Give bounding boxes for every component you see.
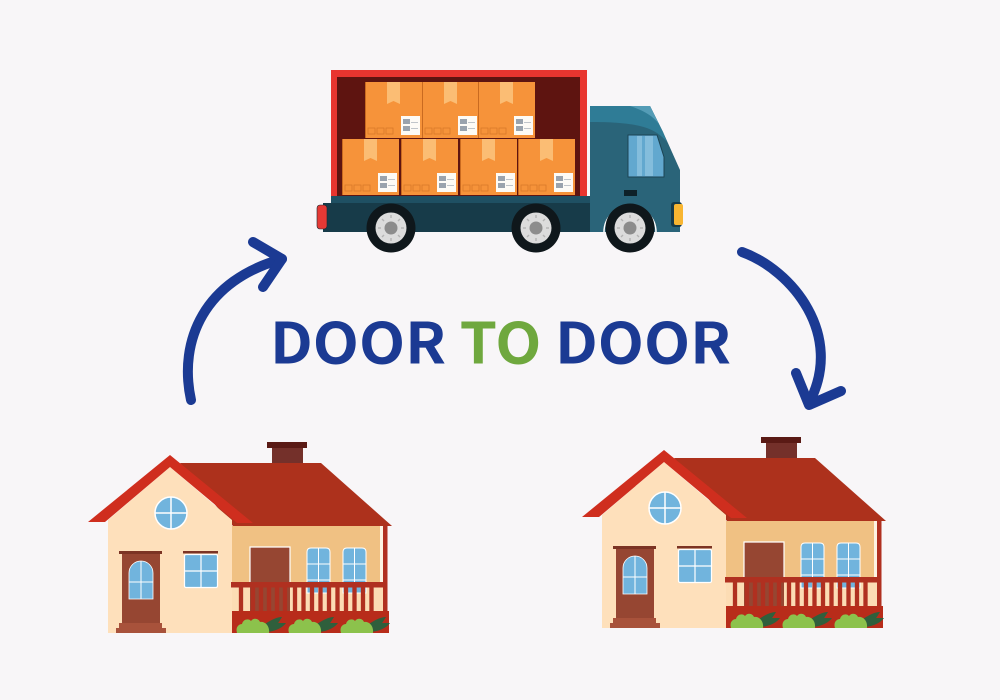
round attic window	[155, 497, 187, 529]
gable roof edge	[88, 455, 253, 523]
delivery truck	[317, 70, 683, 252]
truck cab	[590, 106, 680, 232]
wheels	[366, 204, 656, 252]
title: DOOR TO DOOR	[270, 298, 731, 380]
arrow: truck to house	[742, 252, 841, 405]
door handle	[624, 190, 637, 196]
cargo container	[331, 70, 587, 197]
shrubs	[237, 617, 390, 633]
front door	[116, 551, 166, 633]
front window	[183, 551, 218, 588]
main roof	[180, 463, 392, 526]
tail light	[317, 205, 327, 229]
front gable wall	[108, 467, 232, 633]
headlight	[671, 202, 683, 227]
stacked cardboard boxes	[342, 82, 575, 195]
house: destination	[582, 437, 886, 628]
truck chassis	[323, 196, 590, 232]
chimney	[267, 442, 307, 464]
porch wall	[232, 526, 383, 613]
house: origin	[88, 442, 392, 633]
porch door	[250, 547, 290, 613]
porch windows	[307, 548, 366, 593]
arrow: house to truck	[188, 242, 282, 400]
cab window	[628, 135, 664, 177]
porch railing backdrop	[232, 587, 383, 612]
porch railing	[231, 526, 389, 633]
